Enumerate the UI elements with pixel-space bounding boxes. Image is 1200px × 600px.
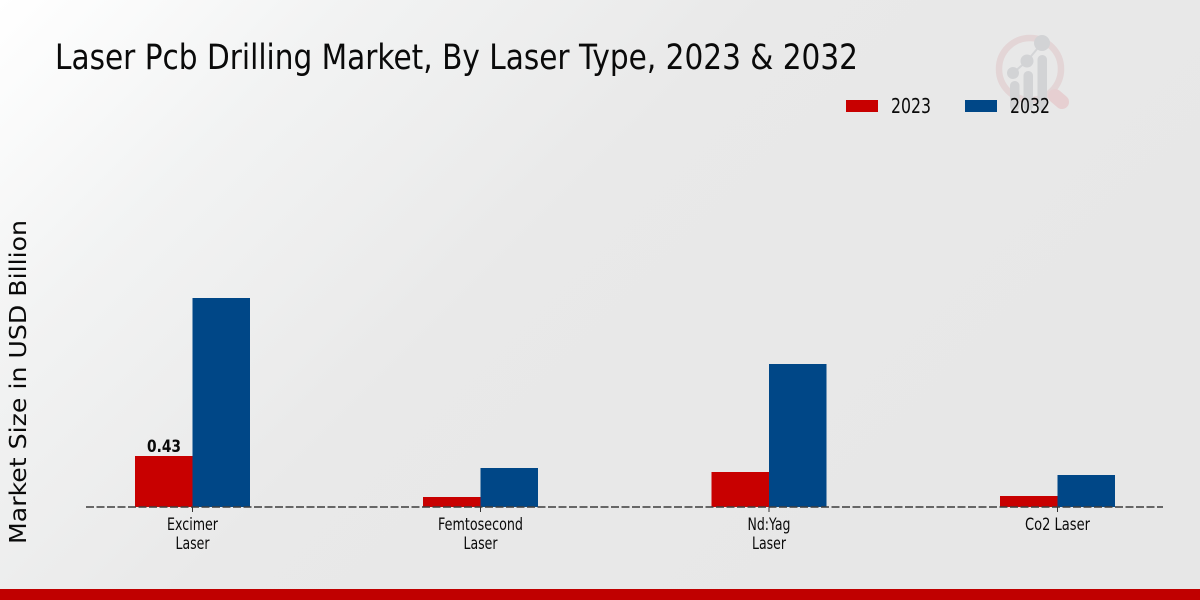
legend item: 2023: 2023 xyxy=(891,94,931,118)
x axis labels xyxy=(167,515,1090,553)
label: Excimer Laser xyxy=(167,515,218,553)
legend item: 2032 xyxy=(965,94,1050,118)
label: Excimer Laser: Laser xyxy=(176,534,210,553)
group: Femtosecond Laser xyxy=(423,468,538,507)
label: Excimer Laser: Excimer xyxy=(167,515,218,534)
label: Nd:Yag Laser: Nd:Yag xyxy=(748,515,790,534)
label: Femtosecond Laser: Femtosecond xyxy=(438,515,523,534)
group: Excimer Laser xyxy=(135,298,250,507)
data label: 0.43: 0.43 xyxy=(147,437,181,456)
group: Nd:Yag Laser xyxy=(712,364,826,507)
icon: watermark logo xyxy=(999,35,1062,111)
label: Co2 Laser: Co2 Laser xyxy=(1025,515,1090,534)
bar chart xyxy=(86,298,1163,512)
label: Femtosecond Laser xyxy=(438,515,523,553)
label: Nd:Yag Laser: Laser xyxy=(752,534,786,553)
footer bar xyxy=(0,589,1200,600)
legend xyxy=(846,94,1050,118)
title: Laser Pcb Drilling Market, By Laser Type, 2023 & 2032 xyxy=(55,38,858,78)
legend item: 2032: 2032 xyxy=(1010,94,1050,118)
label: Femtosecond Laser: Laser xyxy=(464,534,498,553)
group: Co2 Laser xyxy=(1000,475,1115,507)
label: Nd:Yag Laser xyxy=(748,515,790,553)
legend item: 2023 xyxy=(846,94,931,118)
y axis title: Market Size in USD Billion xyxy=(6,220,32,544)
